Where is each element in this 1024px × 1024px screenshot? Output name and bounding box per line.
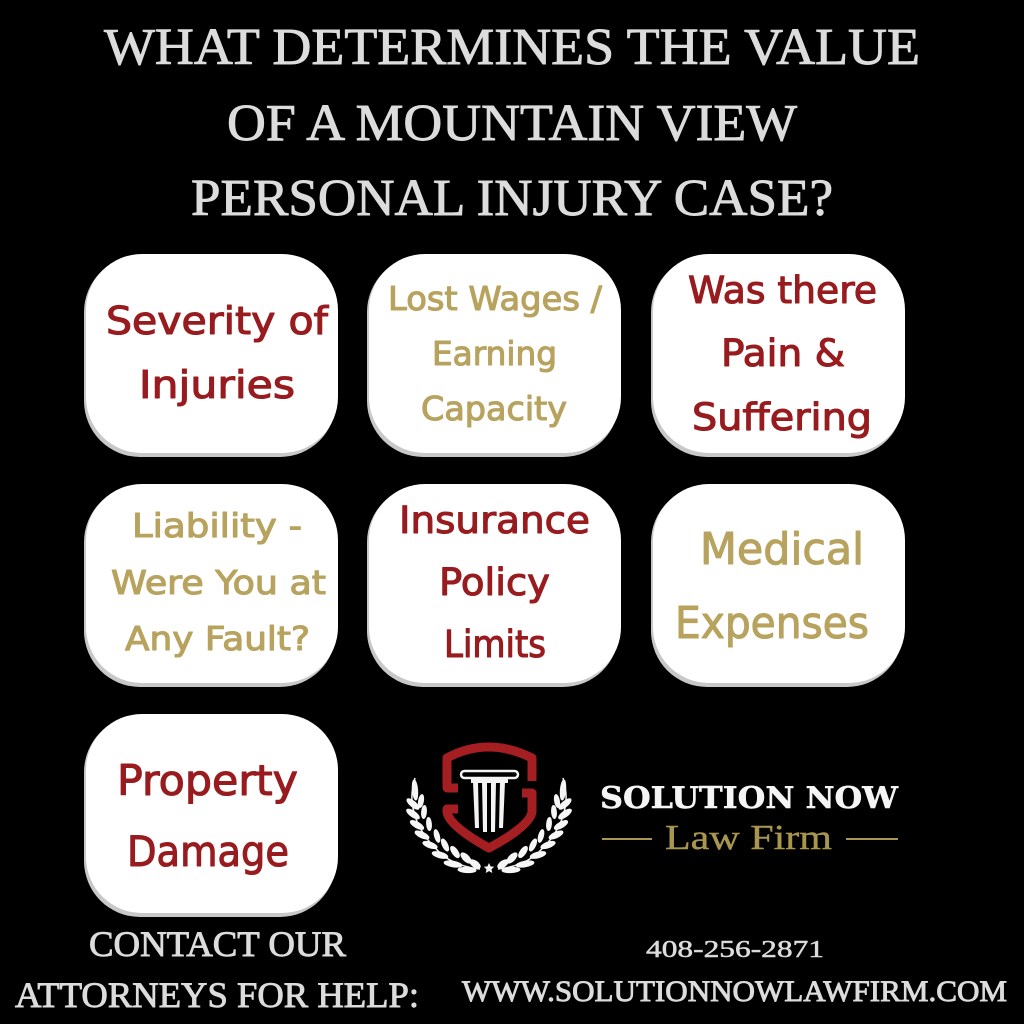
laurel left [405,778,482,873]
card: Property Damage: Damage [127,827,289,876]
card: Severity of Injuries: Injuries [139,363,295,407]
card: Was there Pain & Suffering: Suffering [692,396,872,439]
card: Liability - Were You at Any Fault? [84,484,338,687]
card: Insurance Policy Limits: Insurance [399,499,590,542]
card: Medical Expenses [651,484,905,687]
card: Insurance Policy Limits: Limits [444,623,546,666]
card: Liability - Were You at Any Fault?: Were You at [111,563,326,602]
card: Was there Pain & Suffering: Pain & [721,332,845,375]
logo wordmark: SOLUTION NOW [600,781,899,816]
card: Liability - Were You at Any Fault?: Liability - [132,506,302,545]
title: PERSONAL INJURY CASE? [191,170,833,227]
card: Lost Wages / Earning Capacity [367,254,621,457]
card: Medical Expenses: Medical [700,524,864,575]
card: Was there Pain & Suffering: Was there [688,269,877,312]
card: Severity of Injuries: Severity of [106,299,330,343]
title: OF A MOUNTAIN VIEW [227,95,797,152]
logo wordmark: Law Firm [665,818,832,857]
contact prompt: ATTORNEYS FOR HELP: [15,975,419,1015]
card: Liability - Were You at Any Fault?: Any Fault? [125,619,310,658]
laurel right [496,778,573,873]
card: Lost Wages / Earning Capacity: Earning [432,334,557,373]
card: Lost Wages / Earning Capacity: Capacity [421,389,567,428]
contact prompt: CONTACT OUR [89,924,346,964]
title: WHAT DETERMINES THE VALUE [104,19,920,76]
star [484,863,494,873]
card: Was there Pain & Suffering [651,254,905,457]
logo emblem [405,747,573,873]
card: Lost Wages / Earning Capacity: Lost Wages / [388,279,603,318]
card: Medical Expenses: Expenses [675,598,869,649]
card: Property Damage [84,714,338,917]
title [104,19,920,227]
card: Insurance Policy Limits: Policy [439,561,550,604]
card: Property Damage: Property [117,756,298,805]
card: Insurance Policy Limits [367,484,621,687]
phone number: 408-256-2871 [646,937,824,963]
logo wordmark [600,781,899,857]
website: WWW.SOLUTIONNOWLAWFIRM.COM [462,975,1007,1008]
card: Severity of Injuries [84,254,338,457]
contact prompt [15,924,419,1015]
